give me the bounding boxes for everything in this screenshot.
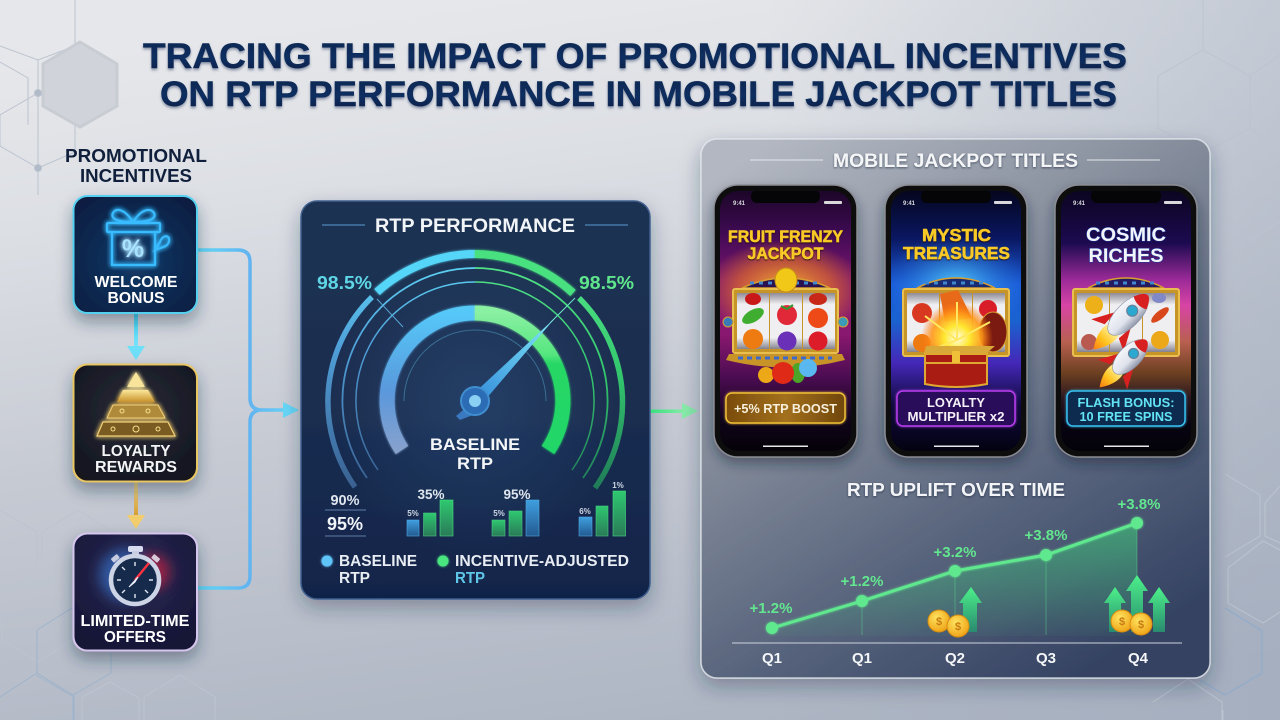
game title: mystic treasures: MYSTIC xyxy=(922,225,991,245)
gauge xyxy=(328,254,623,488)
icon: stopwatch xyxy=(99,546,170,604)
legend: RTP xyxy=(339,570,370,587)
label: limited-time offers: LIMITED-TIME xyxy=(80,613,190,630)
mini bar chart 1: 35% xyxy=(417,487,445,502)
arrow: RTP performance to mobile titles xyxy=(651,403,698,419)
stat: 90% and 95%: 95% xyxy=(327,514,363,534)
legend: RTP xyxy=(455,570,485,587)
arrows and coins: Q4: $ xyxy=(1138,619,1144,631)
slot machine: rockets xyxy=(1073,278,1179,402)
quarter labels: Q1 xyxy=(762,650,782,667)
axis xyxy=(732,642,1182,644)
label: welcome bonus: WELCOME xyxy=(94,274,178,291)
label: welcome bonus xyxy=(94,274,178,307)
mini bar chart 3: 1% xyxy=(612,481,624,490)
phone: fruit frenzy jackpot xyxy=(705,185,865,457)
arrows and coins: Q4 xyxy=(1104,575,1170,635)
stat: 90% and 95%: 90% xyxy=(330,493,360,509)
card: loyalty rewards xyxy=(74,364,197,482)
mini bar chart 3 xyxy=(579,481,626,536)
game title: fruit frenzy jackpot: FRUIT FRENZY xyxy=(728,228,843,246)
badge: loyalty multiplier x2: MULTIPLIER x2 xyxy=(908,409,1004,424)
game title: cosmic riches: COSMIC xyxy=(1086,225,1166,246)
legend: BASELINE xyxy=(339,553,417,570)
badge: loyalty multiplier x2 xyxy=(897,391,1015,426)
label: loyalty rewards xyxy=(95,443,177,476)
data values: +1.2% xyxy=(750,600,792,617)
arrows and coins: Q4: $ xyxy=(1119,616,1125,628)
slot machine: fruit reels xyxy=(723,268,848,384)
game title: cosmic riches: RICHES xyxy=(1088,246,1164,267)
phone: mystic treasures: 9:41 xyxy=(903,201,916,207)
arrow: welcome bonus to loyalty rewards xyxy=(127,313,145,360)
arrow: loyalty rewards to limited-time offers xyxy=(127,482,145,529)
badge: flash bonus 10 free spins xyxy=(1067,391,1185,426)
mini bar chart 3: 6% xyxy=(579,507,591,516)
game title: fruit frenzy jackpot: JACKPOT xyxy=(748,245,824,263)
gauge label: baseline RTP: BASELINE xyxy=(430,436,520,454)
card: limited-time offers xyxy=(74,534,197,650)
value: adjusted 98.5%: 98.5% xyxy=(579,273,634,293)
arrows and coins: Q2: $ xyxy=(936,616,942,628)
chart heading: RTP UPLIFT OVER TIME xyxy=(847,480,1065,500)
icon: loyalty pyramid xyxy=(97,372,175,436)
badge: flash bonus 10 free spins: 10 FREE SPINS xyxy=(1080,409,1173,424)
legend: INCENTIVE-ADJUSTED xyxy=(455,553,629,570)
mini bar chart 2: 95% xyxy=(503,487,531,502)
game title: mystic treasures xyxy=(903,225,1010,263)
data values: +3.8% xyxy=(1118,496,1160,513)
data values xyxy=(750,496,1160,617)
badge: +5% RTP boost: +5% RTP BOOST xyxy=(734,401,837,416)
phone: cosmic riches: 9:41 xyxy=(1073,201,1086,207)
badge: flash bonus 10 free spins: FLASH BONUS: xyxy=(1078,395,1174,410)
card: welcome bonus xyxy=(74,196,197,313)
label: limited-time offers xyxy=(80,613,190,646)
label: welcome bonus: BONUS xyxy=(108,290,164,307)
phone: mystic treasures xyxy=(881,185,1031,457)
game title: fruit frenzy jackpot xyxy=(728,228,843,263)
phone: fruit frenzy jackpot: 9:41 xyxy=(733,201,746,207)
slot machine: treasure chest xyxy=(903,278,1009,387)
phone: cosmic riches xyxy=(1055,185,1197,457)
quarter labels xyxy=(762,650,1149,667)
mini bar chart 2 xyxy=(492,487,539,536)
badge: loyalty multiplier x2: LOYALTY xyxy=(927,395,985,410)
mini bar chart 1 xyxy=(407,487,453,536)
heading: mobile jackpot titles: MOBILE JACKPOT TITLES xyxy=(833,151,1078,172)
gauge label: baseline RTP: RTP xyxy=(457,455,493,473)
game title: mystic treasures: TREASURES xyxy=(903,243,1010,263)
quarter labels: Q3 xyxy=(1036,650,1056,667)
panel: RTP performance xyxy=(301,201,650,599)
gauge needle xyxy=(456,298,575,420)
heading: promotional incentives: INCENTIVES xyxy=(80,166,192,186)
data values: +3.8% xyxy=(1025,527,1067,544)
mini bar chart 1: 5% xyxy=(407,509,419,518)
label: loyalty rewards: REWARDS xyxy=(95,459,177,476)
connector: incentives to RTP performance xyxy=(198,250,299,588)
heading: promotional incentives: PROMOTIONAL xyxy=(65,146,207,166)
arrows and coins: Q2 xyxy=(928,587,982,637)
heading: RTP performance: RTP PERFORMANCE xyxy=(375,216,575,237)
title xyxy=(143,37,1127,114)
quarter labels: Q4 xyxy=(1128,650,1149,667)
label: limited-time offers: OFFERS xyxy=(104,629,166,646)
label: loyalty rewards: LOYALTY xyxy=(102,443,171,460)
quarter labels: Q2 xyxy=(945,650,965,667)
quarter labels: Q1 xyxy=(852,650,872,667)
title: ON RTP PERFORMANCE IN MOBILE JACKPOT TITLES xyxy=(160,75,1117,114)
value: baseline 98.5%: 98.5% xyxy=(317,273,372,293)
heading: promotional incentives xyxy=(65,146,207,186)
area under line xyxy=(772,523,1137,636)
game title: cosmic riches xyxy=(1086,225,1166,267)
arrows and coins: Q2: $ xyxy=(955,621,961,633)
panel: mobile jackpot titles xyxy=(701,139,1210,678)
gauge label: baseline RTP xyxy=(430,436,520,473)
badge: +5% RTP boost xyxy=(726,393,845,423)
legend xyxy=(322,553,629,587)
mini bar chart 2: 5% xyxy=(493,509,505,518)
icon: gift box with percent: % xyxy=(122,235,144,263)
chart: RTP uplift over time xyxy=(732,480,1182,667)
data values: +1.2% xyxy=(841,573,883,590)
stat: 90% and 95% xyxy=(325,493,366,536)
line series xyxy=(766,517,1143,634)
data values: +3.2% xyxy=(934,544,976,561)
title: TRACING THE IMPACT OF PROMOTIONAL INCENTIVES xyxy=(143,37,1127,76)
